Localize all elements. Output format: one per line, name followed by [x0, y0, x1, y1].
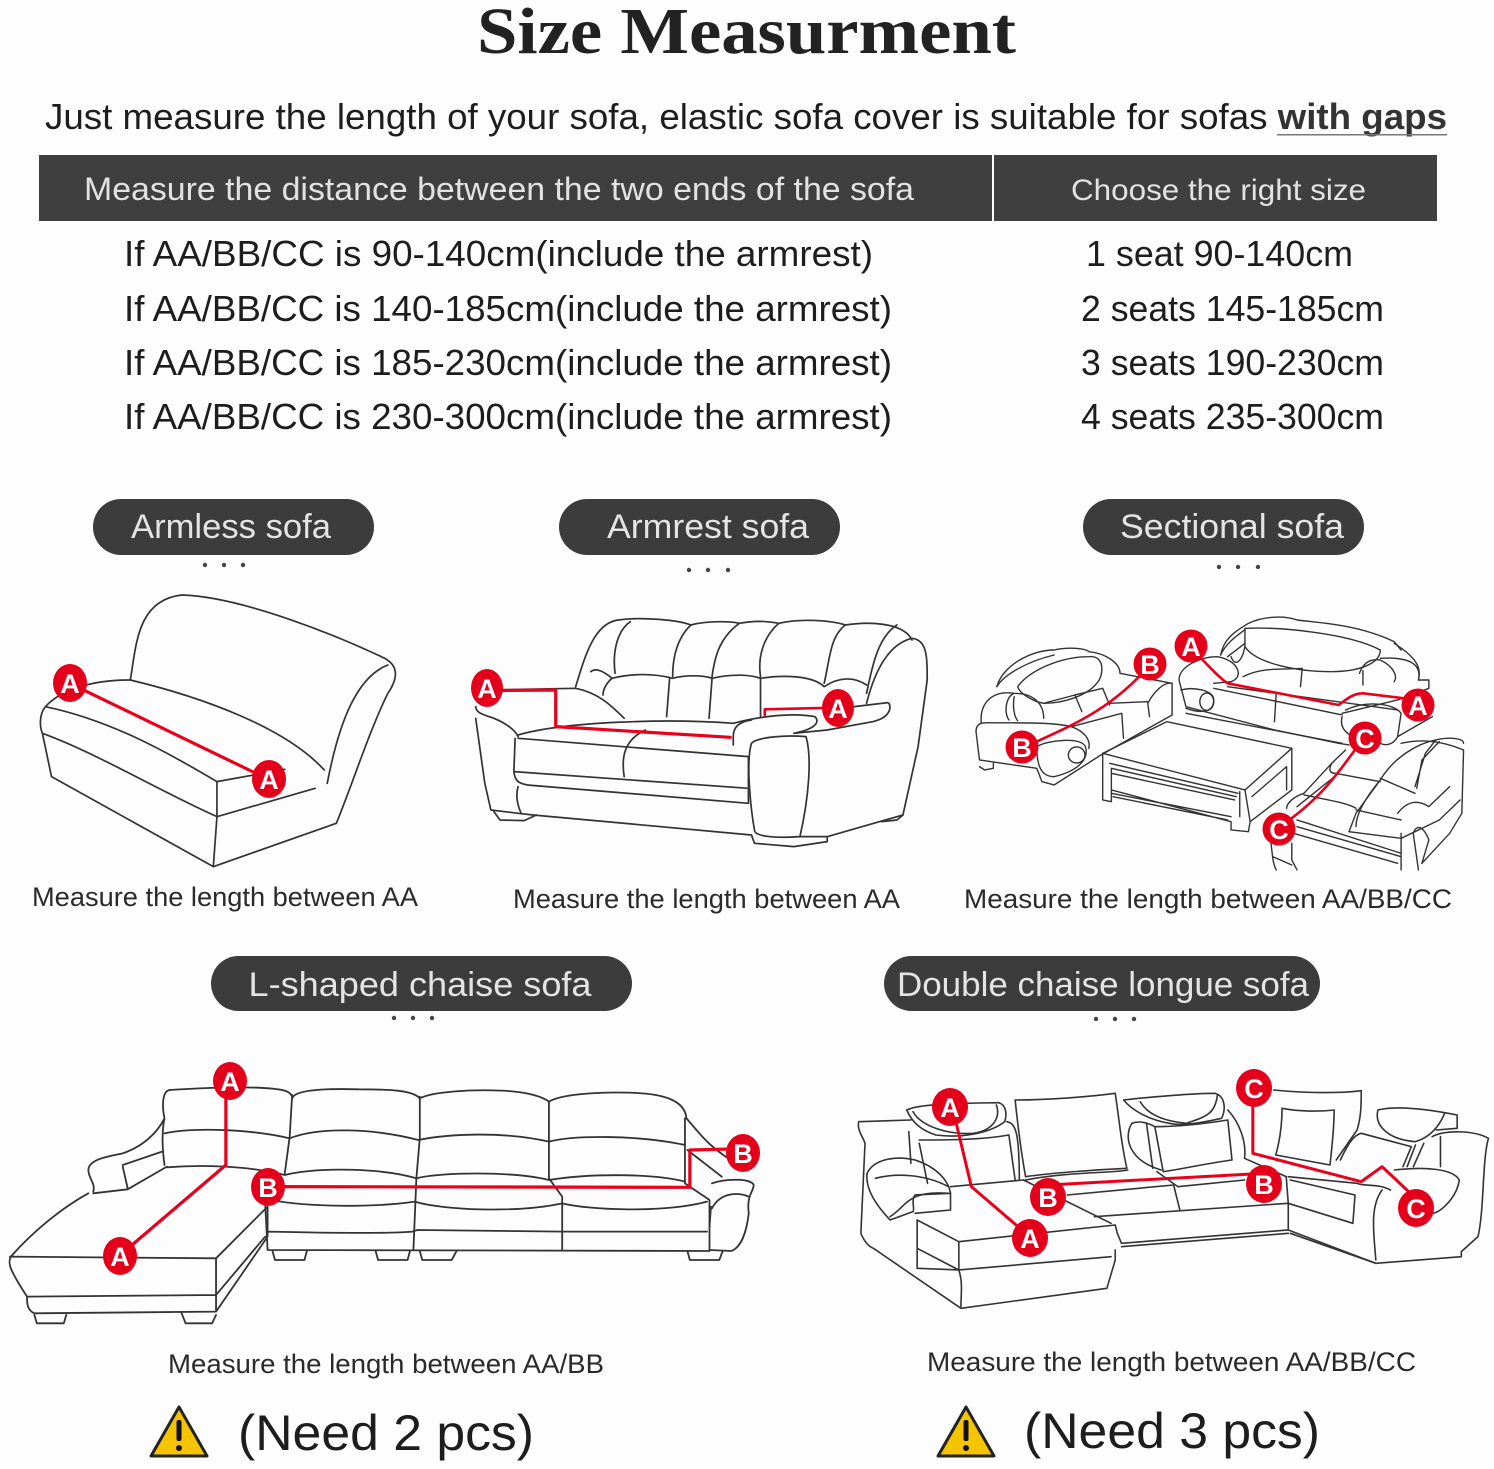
- note: need 3 pcs: (Need 3 pcs): [1024, 1403, 1320, 1459]
- badges: L-shaped chaise sofa: [103, 1062, 760, 1275]
- badges: sectional sofa: C: [1269, 815, 1289, 845]
- pill: armless sofa: [93, 499, 374, 567]
- table rows: measurement ranges: If AA/BB/CC is 140-185cm(include the armrest): [124, 288, 892, 329]
- pill: double chaise longue sofa: Double chaise longue sofa: [897, 966, 1309, 1004]
- badges: armless sofa: A: [259, 765, 279, 795]
- caption: double chaise longue sofa: Measure the length between AA/BB/CC: [927, 1347, 1416, 1377]
- badges: double chaise longue sofa: [932, 1069, 1434, 1257]
- pill: L-shaped chaise sofa: L-shaped chaise sofa: [248, 966, 592, 1004]
- icon: warning triangle left: [151, 1407, 207, 1456]
- pill: sectional sofa: Sectional sofa: [1120, 508, 1344, 546]
- badges: double chaise longue sofa: A: [940, 1093, 960, 1123]
- table header: Choose the right size: [1071, 174, 1366, 207]
- table rows: seat sizes: [1081, 233, 1384, 437]
- table rows: measurement ranges: [124, 233, 892, 437]
- badges: sectional sofa: [1006, 630, 1434, 846]
- badges: double chaise longue sofa: C: [1244, 1074, 1264, 1104]
- illustration: armless sofa: [40, 595, 395, 867]
- table header: [39, 155, 1437, 221]
- badges: L-shaped chaise sofa: A: [220, 1067, 240, 1097]
- badges: armless sofa: A: [60, 669, 80, 699]
- illustration: L-shaped chaise sofa: [9, 1083, 754, 1323]
- table rows: measurement ranges: If AA/BB/CC is 90-140cm(include the armrest): [124, 233, 873, 274]
- badges: double chaise longue sofa: B: [1254, 1170, 1274, 1200]
- badges: L-shaped chaise sofa: B: [733, 1139, 753, 1169]
- pill: sectional sofa: [1083, 499, 1364, 569]
- pill: armless sofa: Armless sofa: [131, 508, 331, 546]
- illustration: armrest sofa: [476, 619, 927, 847]
- table rows: measurement ranges: If AA/BB/CC is 230-300cm(include the armrest): [124, 396, 892, 437]
- table rows: seat sizes: 1 seat 90-140cm: [1086, 233, 1353, 274]
- pill: armrest sofa: Armrest sofa: [607, 508, 809, 546]
- illustration: sectional sofa: [976, 617, 1464, 870]
- badges: sectional sofa: A: [1181, 632, 1201, 662]
- subtitle: Just measure the length of your sofa, elastic sofa cover is suitable for sofas with gaps: [45, 96, 1447, 137]
- pill: armrest sofa: [559, 499, 840, 572]
- table rows: measurement ranges: If AA/BB/CC is 185-230cm(include the armrest): [124, 342, 892, 383]
- table rows: seat sizes: 2 seats 145-185cm: [1081, 288, 1384, 329]
- pill: L-shaped chaise sofa: [211, 956, 632, 1020]
- badges: armless sofa: [53, 664, 286, 798]
- caption: sectional sofa: Measure the length between AA/BB/CC: [964, 884, 1452, 914]
- badges: double chaise longue sofa: A: [1020, 1224, 1040, 1254]
- badges: armrest sofa: [471, 669, 854, 727]
- badges: sectional sofa: A: [1408, 691, 1428, 721]
- badges: armrest sofa: A: [828, 694, 848, 724]
- pill: double chaise longue sofa: [884, 956, 1320, 1021]
- caption: armless sofa: Measure the length between AA: [32, 882, 418, 912]
- badges: armrest sofa: A: [477, 674, 497, 704]
- badges: L-shaped chaise sofa: A: [110, 1242, 130, 1272]
- note: need 2 pcs: (Need 2 pcs): [238, 1405, 534, 1461]
- badges: sectional sofa: B: [1140, 650, 1160, 680]
- icon: warning triangle right: [938, 1407, 994, 1456]
- table rows: seat sizes: 3 seats 190-230cm: [1081, 342, 1384, 383]
- badges: sectional sofa: C: [1355, 724, 1375, 754]
- illustration: double chaise longue sofa: [858, 1090, 1488, 1308]
- caption: L-shaped chaise sofa: Measure the length between AA/BB: [168, 1349, 604, 1379]
- table rows: seat sizes: 4 seats 235-300cm: [1081, 396, 1384, 437]
- badges: sectional sofa: B: [1012, 733, 1032, 763]
- table header: Measure the distance between the two ends of the sofa: [84, 171, 914, 207]
- badges: double chaise longue sofa: B: [1038, 1183, 1058, 1213]
- badges: double chaise longue sofa: C: [1406, 1194, 1426, 1224]
- caption: armrest sofa: Measure the length between AA: [513, 884, 900, 914]
- badges: L-shaped chaise sofa: B: [258, 1173, 278, 1203]
